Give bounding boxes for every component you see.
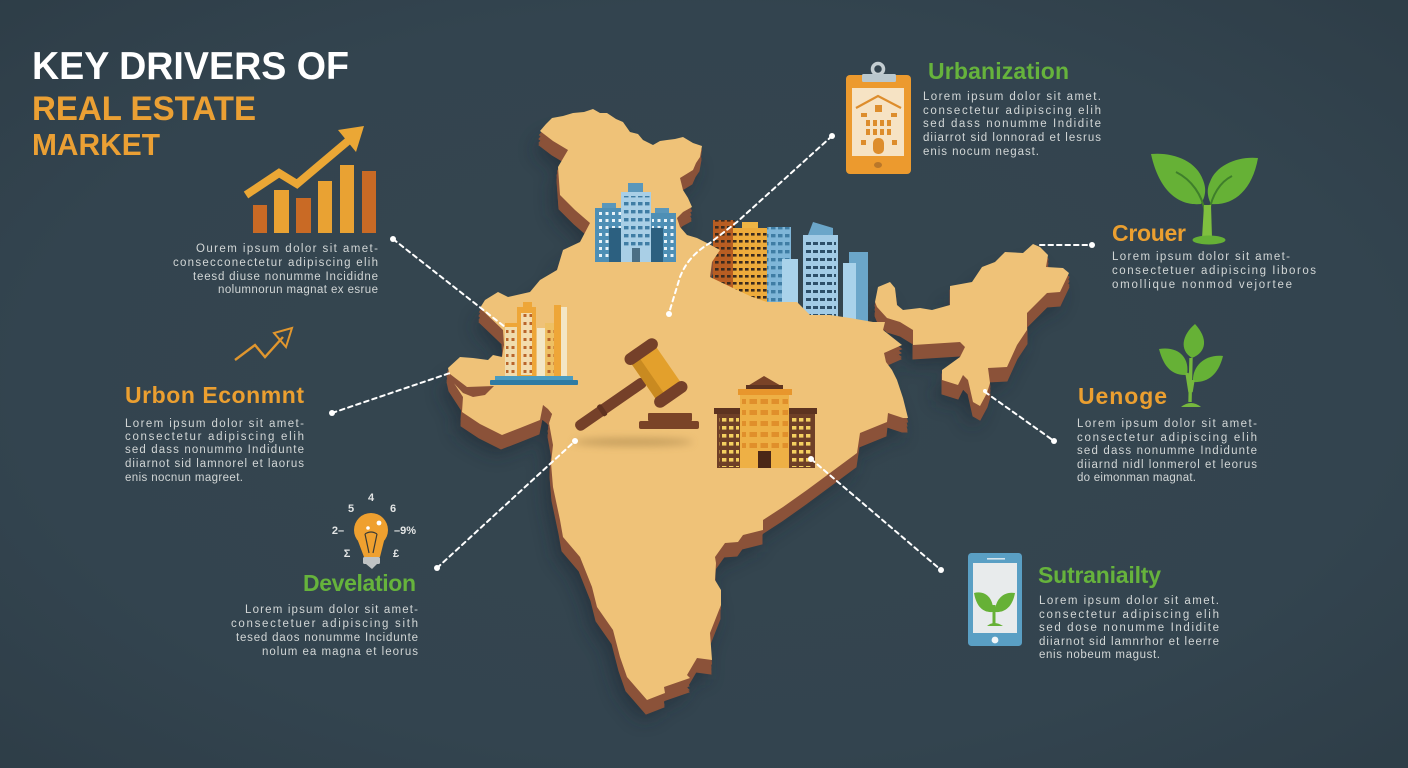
text block: diiarnd nidl lonmerol et leorus	[1077, 459, 1257, 471]
icon: light bulb with numbers: 2–	[332, 525, 344, 537]
text block: Lorem ipsum dolor sit amet-	[1112, 251, 1290, 263]
text block: sed dass nonumme Indidunte	[1077, 445, 1257, 457]
text block: diiarnot sid lamnrhor et leerre	[1039, 636, 1219, 648]
panel: Develation	[231, 492, 418, 658]
heading: Urbon Econmnt	[125, 382, 304, 408]
map of India	[442, 109, 1069, 720]
text block: sed dose nonumme Indidite	[1039, 622, 1219, 634]
connector: Uenoge	[983, 389, 1057, 444]
text block: consecconectetur adipiscing elih	[173, 257, 378, 269]
icon: sprout with three leaves	[1159, 324, 1223, 407]
icon: small rising arrow	[235, 328, 292, 360]
sound block	[639, 413, 699, 429]
text block: Lorem ipsum dolor sit amet.	[923, 91, 1101, 103]
icon: phone with sprout	[968, 553, 1022, 646]
panel: growth chart	[173, 126, 378, 296]
map shadow	[442, 129, 1063, 720]
text block: nolum ea magna et leorus	[262, 646, 418, 658]
skyline behind northern border	[713, 220, 868, 325]
text block: consectetur adipiscing elih	[1039, 609, 1219, 621]
text block	[173, 243, 378, 296]
text block: enis nocum negast.	[923, 146, 1039, 158]
text block: enis nobeum magust.	[1039, 649, 1160, 661]
text block: consectetuer adipiscing sith	[231, 618, 418, 630]
title: REAL ESTATE	[32, 90, 256, 128]
text block: nolumnorun magnat ex esrue	[218, 284, 378, 296]
connector: Develation	[434, 438, 578, 571]
text block	[923, 91, 1101, 158]
icon: light bulb with numbers: 5	[348, 503, 354, 515]
connector: Urbon Econmnt	[329, 373, 450, 416]
panel: Urbon Econmnt	[125, 328, 304, 484]
text block: Lorem ipsum dolor sit amet-	[125, 418, 304, 430]
text block: Ourem ipsum dolor sit amet-	[196, 243, 378, 255]
text block	[231, 604, 418, 658]
buildings: orange towers on platform	[490, 302, 578, 385]
text block: do eimonman magnat.	[1077, 472, 1196, 484]
gulf side band	[449, 374, 494, 397]
heading: Crouer	[1112, 220, 1186, 246]
buildings: blue towers	[595, 183, 676, 262]
panel: Uenoge	[1077, 324, 1257, 484]
icon: light bulb with numbers: 6	[390, 503, 396, 515]
panel: Crouer	[1112, 154, 1316, 291]
text block	[1112, 251, 1316, 291]
connector: Sutraniailty	[808, 456, 944, 573]
text block: diiarrot sid lonnorad et lesrus	[923, 132, 1101, 144]
icon: light bulb with numbers: –9%	[394, 525, 416, 537]
gavel	[558, 336, 699, 455]
icon: bar chart with rising arrow	[246, 126, 376, 233]
text block: sed dass nonummo Indidunte	[125, 444, 304, 456]
title: KEY DRIVERS OF	[32, 45, 349, 88]
connector: chart to Gujarat	[390, 236, 505, 327]
text block: sed dass nonumme Indidite	[923, 118, 1101, 130]
text block: enis nocnun magreet.	[125, 472, 243, 484]
text block: omollique nonmod vejortee	[1112, 279, 1292, 291]
text block: consectetur adipiscing elih	[1077, 432, 1257, 444]
text block	[1077, 418, 1257, 484]
panel: Sutraniailty	[968, 553, 1219, 661]
map top face	[448, 109, 1069, 700]
text block: consectetur adipiscing elih	[923, 105, 1101, 117]
panel: Urbanization	[846, 58, 1101, 174]
icon: light bulb with numbers: Σ	[344, 548, 351, 560]
heading: Urbanization	[928, 58, 1069, 84]
heading: Sutraniailty	[1038, 562, 1161, 588]
icon: light bulb with numbers: 4	[368, 492, 375, 504]
text block: teesd diuse nonumme Incididne	[193, 271, 378, 283]
text block: consectetur adipiscing elih	[125, 431, 304, 443]
title	[32, 45, 349, 162]
text block: consectetuer adipiscing Iiboros	[1112, 265, 1316, 277]
connector: Urbanization	[666, 133, 835, 317]
text block	[125, 418, 304, 484]
text block: Lorem ipsum dolor sit amet-	[1077, 418, 1257, 430]
map extruded side	[447, 113, 1069, 714]
icon: tablet clipboard with building	[846, 64, 911, 174]
connector: Crouer	[1040, 242, 1095, 248]
buildings: brown and orange block	[714, 376, 817, 468]
title: MARKET	[32, 128, 160, 162]
gavel shadow	[573, 438, 693, 446]
heading: Develation	[303, 570, 416, 596]
text block: diiarnot sid lamnorel et laorus	[125, 458, 304, 470]
icon: light bulb with numbers: £	[393, 548, 399, 560]
text block: tesed daos nonumme Incidunte	[236, 632, 418, 644]
text block: Lorem ipsum dolor sit amet-	[245, 604, 418, 616]
west coast notch	[543, 405, 552, 423]
gavel head and handle	[558, 336, 690, 455]
text block: Lorem ipsum dolor sit amet.	[1039, 595, 1219, 607]
heading: Uenoge	[1078, 383, 1167, 409]
icon: light bulb with numbers	[332, 492, 416, 569]
text block	[1039, 595, 1219, 661]
icon: large sprout	[1151, 154, 1258, 244]
